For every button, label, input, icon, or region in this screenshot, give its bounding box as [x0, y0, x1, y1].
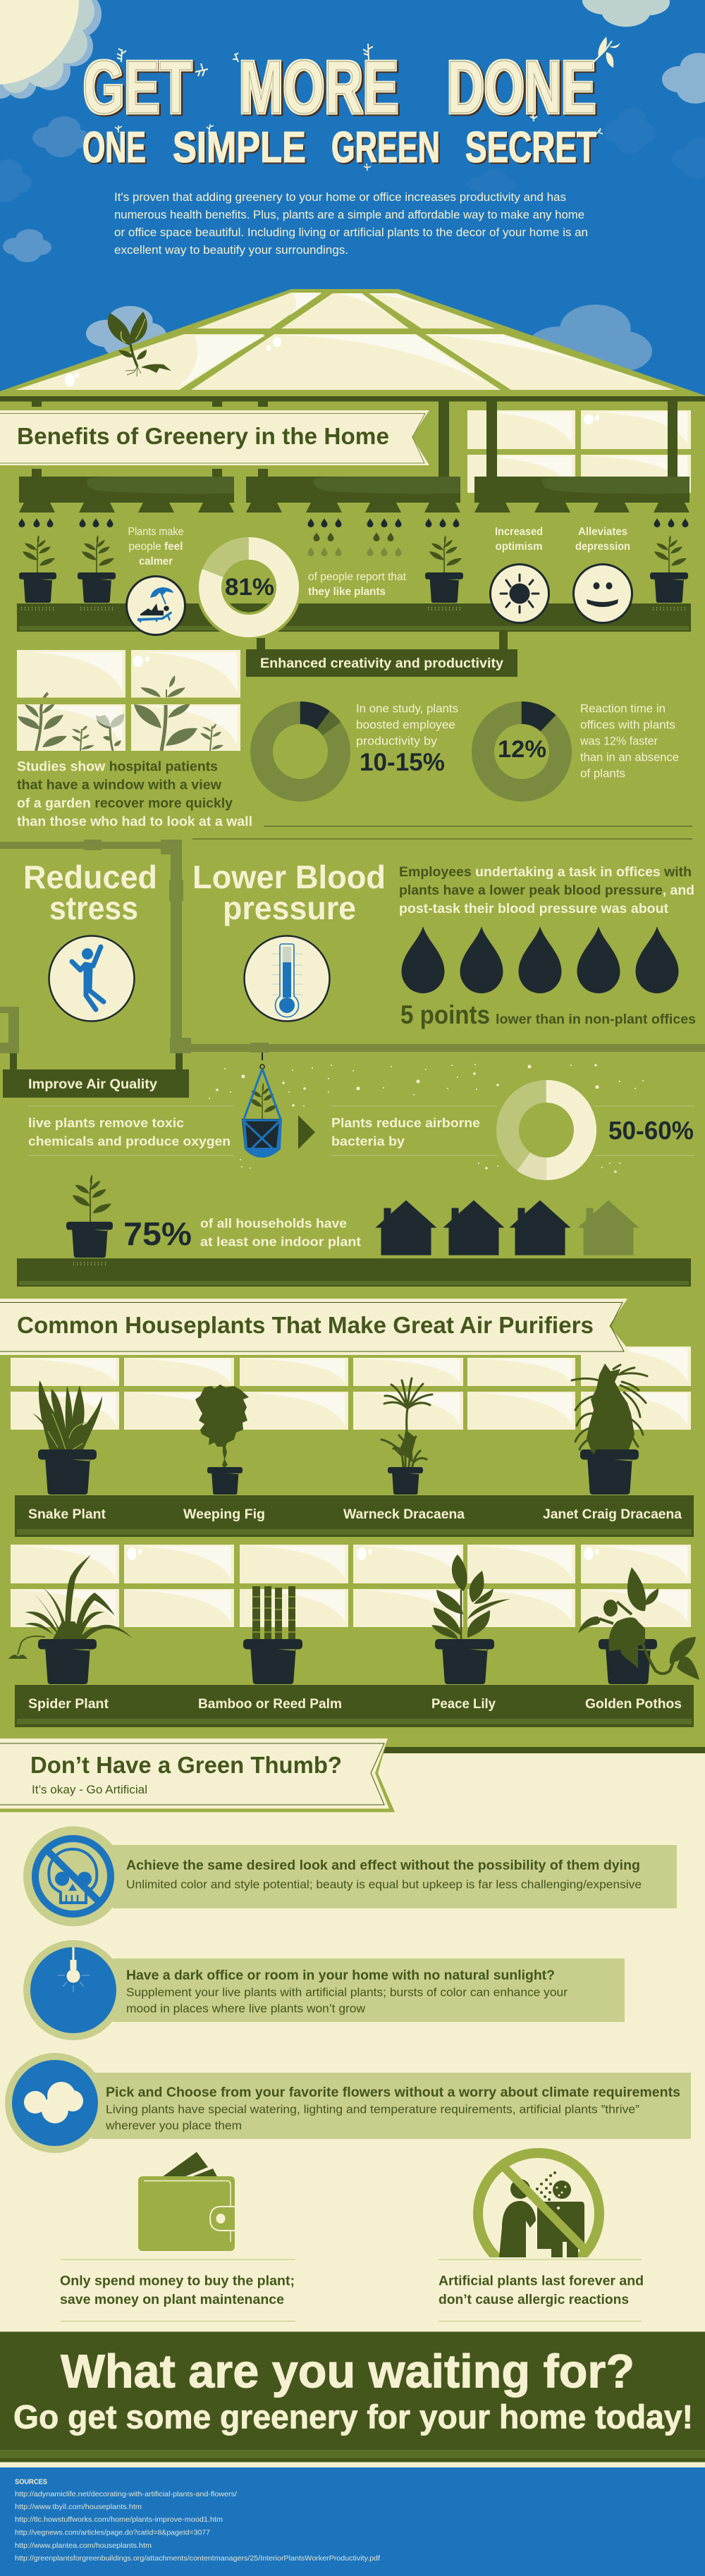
text: increased optimism: Increased	[495, 526, 543, 538]
sources panel: http://greenplantsforgreenbuildings.org/attachments/contentmanagers/25/InteriorPlantsWorkerProductivity.pdf	[15, 2554, 380, 2563]
banner: benefits of greenery	[0, 410, 429, 465]
text: plants make people feel calmer: calmer	[139, 556, 173, 568]
text: of people report that they like plants: they like plants	[308, 586, 386, 598]
text: one study employee productivity: productivity by	[356, 735, 438, 747]
text: live plants remove toxic chemicals: chemicals and produce oxygen	[28, 1134, 231, 1148]
text: artificial plants last forever: Artificial plants last forever and	[439, 2274, 644, 2288]
text: studies show hospital patients: than those who had to look at a wall	[17, 815, 252, 829]
title: MORE	[239, 46, 398, 129]
title: DONE	[447, 46, 596, 129]
text: reaction time: was 12% faster	[580, 735, 658, 747]
text: employees blood pressure: post-task their blood pressure was about	[399, 902, 669, 916]
text: increased optimism	[495, 526, 543, 553]
donut chart: 81 percent: 81%	[225, 574, 274, 601]
text: 75 percent of households: of all households have	[200, 1215, 347, 1231]
background: sky	[0, 0, 705, 396]
shelf one with plant names: Janet Craig Dracaena	[543, 1507, 682, 1522]
panel: dark office: Supplement your live plants with artificial plants; bursts of color can enhance your	[126, 1985, 568, 1999]
panel: dark office	[23, 1940, 625, 2040]
title	[82, 46, 596, 172]
icon: sun	[0, 0, 102, 99]
plant: golden pothos	[578, 1567, 699, 1684]
text: 5 points	[400, 1000, 696, 1029]
text: 5 points: 5 points	[400, 1000, 490, 1029]
text: live plants remove toxic chemicals: live plants remove toxic	[28, 1115, 184, 1130]
icon: leaf sprigs on the title letters	[115, 37, 620, 171]
pipes	[0, 840, 705, 1053]
plant: bamboo or reed palm	[243, 1586, 302, 1684]
icon: thermometer	[244, 936, 330, 1021]
text: 50-60 percent: 50-60%	[608, 1116, 694, 1145]
text: increased optimism: optimism	[495, 541, 543, 553]
background: green wall	[0, 396, 705, 1750]
text: alleviates depression: Alleviates	[578, 526, 627, 538]
window with garden view	[17, 650, 240, 751]
call to action band	[0, 2332, 705, 2462]
icon: smiley face	[574, 564, 632, 623]
icon: person relaxing on lounge chair	[127, 577, 185, 634]
sources panel: http://www.plantea.com/houseplants.htm	[15, 2541, 152, 2550]
beam posts	[32, 401, 678, 477]
donut chart: 10-15 percent productivity	[262, 713, 339, 790]
label: enhanced creativity and productivity	[246, 649, 517, 677]
donut chart: 12 percent reaction time: 12%	[498, 736, 546, 763]
icon: potted plant	[66, 1174, 113, 1258]
heading: reduced stress: stress	[49, 890, 138, 926]
panel: pick and choose: wherever you place them	[105, 2119, 242, 2132]
donut chart: 50-60 percent	[508, 1091, 585, 1169]
text: plants make people feel calmer	[128, 526, 183, 568]
icon: sun	[491, 564, 548, 623]
donut chart: 12 percent reaction time	[483, 713, 560, 790]
air particles	[209, 1065, 643, 1172]
plant: snake plant	[32, 1380, 102, 1495]
plant: peace lily	[431, 1554, 510, 1684]
heading: common houseplants: Common Houseplants That Make Great Air Purifiers	[17, 1312, 594, 1338]
label: improve air quality: Improve Air Quality	[28, 1077, 157, 1092]
icon: no allergies	[478, 2153, 599, 2274]
text: 75 percent of households: at least one indoor plant	[200, 1234, 361, 1249]
icon: crossed-out skull	[35, 1839, 111, 1914]
title: GREEN	[331, 123, 440, 172]
roof	[0, 289, 705, 402]
panel: pick and choose: Living plants have special watering, lighting and temperature requirements, artificial plants ”thrive”	[106, 2102, 639, 2116]
water drops	[18, 518, 688, 556]
text: reaction time: of plants	[580, 767, 625, 780]
text: employees blood pressure: Employees undertaking a task in offices with	[399, 865, 692, 880]
panel: achieve the same look	[23, 1826, 677, 1926]
text: artificial plants last forever: don’t cause allergic reactions	[439, 2293, 629, 2307]
shelf two with plant names: Spider Plant	[28, 1697, 109, 1712]
window: upper right	[467, 410, 691, 493]
heading: go get some greenery: Go get some greenery for your home today!	[13, 2398, 693, 2435]
title: SIMPLE	[173, 123, 306, 172]
panel: pick and choose	[5, 2053, 691, 2153]
plant: janet craig dracaena	[572, 1363, 647, 1495]
banner: common houseplants	[0, 1299, 633, 1355]
text: studies show hospital patients: Studies show hospital patients	[17, 760, 218, 774]
five large drops	[402, 926, 678, 993]
window row one	[11, 1347, 691, 1430]
shelf two with plant names: Golden Pothos	[585, 1697, 682, 1712]
intro paragraph: excellent way to beautify your surroundings.	[114, 243, 348, 257]
text: artificial plants last forever	[439, 2274, 644, 2307]
title: GET	[83, 46, 192, 129]
text: only spend money: save money on plant maintenance	[60, 2293, 284, 2307]
plant: weeping fig	[195, 1385, 249, 1495]
text: plants reduce airborne bacteria: Plants reduce airborne	[331, 1115, 480, 1130]
shelf one with plant names	[15, 1495, 694, 1537]
text: employees blood pressure: plants have a lower peak blood pressure , and	[399, 883, 694, 898]
heading: lower blood pressure	[192, 859, 386, 926]
panel: pick and choose: Pick and Choose from your favorite flowers without a worry about climate requirements	[106, 2085, 680, 2100]
heading: what are you waiting for: What are you waiting for?	[61, 2345, 634, 2398]
sources panel: http://adynamiclife.net/decorating-with-artificial-plants-and-flowers/	[15, 2490, 237, 2498]
icon: light bulb	[30, 1947, 116, 2033]
shelf one with plant names: Warneck Dracaena	[343, 1507, 465, 1522]
icon: hanging plant	[242, 1053, 282, 1158]
panel: dark office: Have a dark office or room in your home with no natural sunlight?	[126, 1968, 555, 1983]
icon: four houses	[375, 1200, 639, 1255]
text: studies show hospital patients: that have a window with a view	[17, 778, 221, 792]
panel: achieve the same look: Unlimited color and style potential; beauty is equal but upkeep is far less challenging/expensive	[126, 1878, 642, 1891]
plant: warneck dracaena	[381, 1378, 432, 1495]
icon: relaxed person	[49, 936, 134, 1021]
shelf: households	[17, 1258, 691, 1287]
sources panel	[0, 2467, 705, 2576]
shelf two with plant names	[15, 1685, 694, 1727]
text: reaction time: than in an absence	[580, 752, 679, 764]
text: one study employee productivity: In one study, plants	[356, 702, 458, 715]
text: only spend money	[60, 2274, 295, 2307]
text: one study employee productivity	[356, 702, 458, 776]
sources panel: http://vegnews.com/articles/page.do?catId=8&pageId=3077	[15, 2528, 210, 2537]
title: SECRET	[465, 123, 596, 172]
text: plants reduce airborne bacteria: bacteria by	[331, 1134, 405, 1148]
connectors to creativity box	[257, 632, 508, 650]
text: only spend money: Only spend money to buy the plant;	[60, 2274, 295, 2288]
intro paragraph	[114, 190, 588, 257]
text: one study employee productivity: boosted employee	[356, 719, 455, 732]
shelf two with plant names: Bamboo or Reed Palm	[198, 1697, 342, 1712]
text: one study employee productivity: 10-15%	[360, 749, 445, 776]
icon: sprout on roof	[108, 312, 171, 376]
arrow	[298, 1115, 315, 1149]
text: reaction time: offices with plants	[580, 719, 675, 732]
clouds in the sky	[0, 0, 705, 389]
heading: benefits of greenery in the home: Benefits of Greenery in the Home	[17, 423, 389, 449]
sources panel: SOURCES	[15, 2477, 47, 2486]
text: 75 percent of households	[123, 1215, 361, 1252]
title: ONE	[82, 123, 146, 172]
shelf one with plant names: Snake Plant	[28, 1507, 106, 1522]
background: cream lower section	[0, 1747, 705, 2467]
text: studies show hospital patients: of a garden recover more quickly	[17, 797, 233, 811]
label: improve air quality	[3, 1069, 189, 1098]
panel: dark office: mood in places where live plants won’t grow	[126, 2002, 366, 2015]
intro paragraph: It's proven that adding greenery to your home or office increases productivity and has	[114, 190, 566, 204]
subheading: go artificial: It’s okay - Go Artificial	[32, 1783, 147, 1796]
text: plants make people feel calmer: Plants make	[128, 526, 183, 538]
text: live plants remove toxic chemicals	[28, 1115, 231, 1148]
panel: achieve the same look: Achieve the same desired look and effect without the possibility of them dying	[126, 1858, 640, 1873]
heading: reduced stress: Reduced	[23, 859, 157, 895]
shelf one with plant names: Weeping Fig	[183, 1507, 265, 1522]
icon: wallet	[138, 2152, 235, 2251]
dark strip above cream section	[381, 1747, 705, 1753]
text: reaction time	[580, 702, 679, 780]
shelf with potted plants	[17, 535, 691, 632]
banner: green thumb	[0, 1738, 395, 1812]
text: 75 percent of households: 75%	[123, 1215, 192, 1252]
heading: don't have a green thumb: Don’t Have a Green Thumb?	[30, 1752, 342, 1778]
heading: lower blood pressure: pressure	[223, 890, 356, 926]
text: studies show hospital patients	[17, 760, 252, 829]
intro paragraph: numerous health benefits. Plus, plants are a simple and affordable way to make any home	[114, 208, 584, 221]
text: reaction time: Reaction time in	[580, 702, 666, 715]
heading: lower blood pressure: Lower Blood	[192, 859, 386, 895]
icon: cloud	[12, 2060, 98, 2146]
text: plants make people feel calmer: people feel	[128, 541, 183, 553]
shelf two with plant names: Peace Lily	[431, 1697, 496, 1712]
text: of people report that they like plants	[308, 571, 407, 598]
window row two	[11, 1545, 691, 1627]
sources panel: http://www.tbyil.com/houseplants.htm	[15, 2503, 142, 2511]
sources panel: http://tlc.howstuffworks.com/home/plants-improve-mood1.htm	[15, 2515, 223, 2524]
text: alleviates depression	[575, 526, 630, 553]
text: employees blood pressure	[399, 865, 694, 916]
heading: reduced stress	[23, 859, 157, 926]
text: alleviates depression: depression	[575, 541, 630, 553]
text: of people report that they like plants: of people report that	[308, 571, 407, 583]
text: plants reduce airborne bacteria	[331, 1115, 480, 1148]
intro paragraph: or office space beautiful. Including living or artificial plants to the decor of your home is an	[114, 226, 588, 239]
donut chart: 81 percent	[196, 534, 302, 640]
text: 5 points: lower than in non-plant offices	[496, 1012, 696, 1027]
grow lights	[19, 477, 689, 513]
label: enhanced creativity and productivity: Enhanced creativity and productivity	[260, 656, 503, 671]
plant: spider plant	[8, 1554, 133, 1684]
